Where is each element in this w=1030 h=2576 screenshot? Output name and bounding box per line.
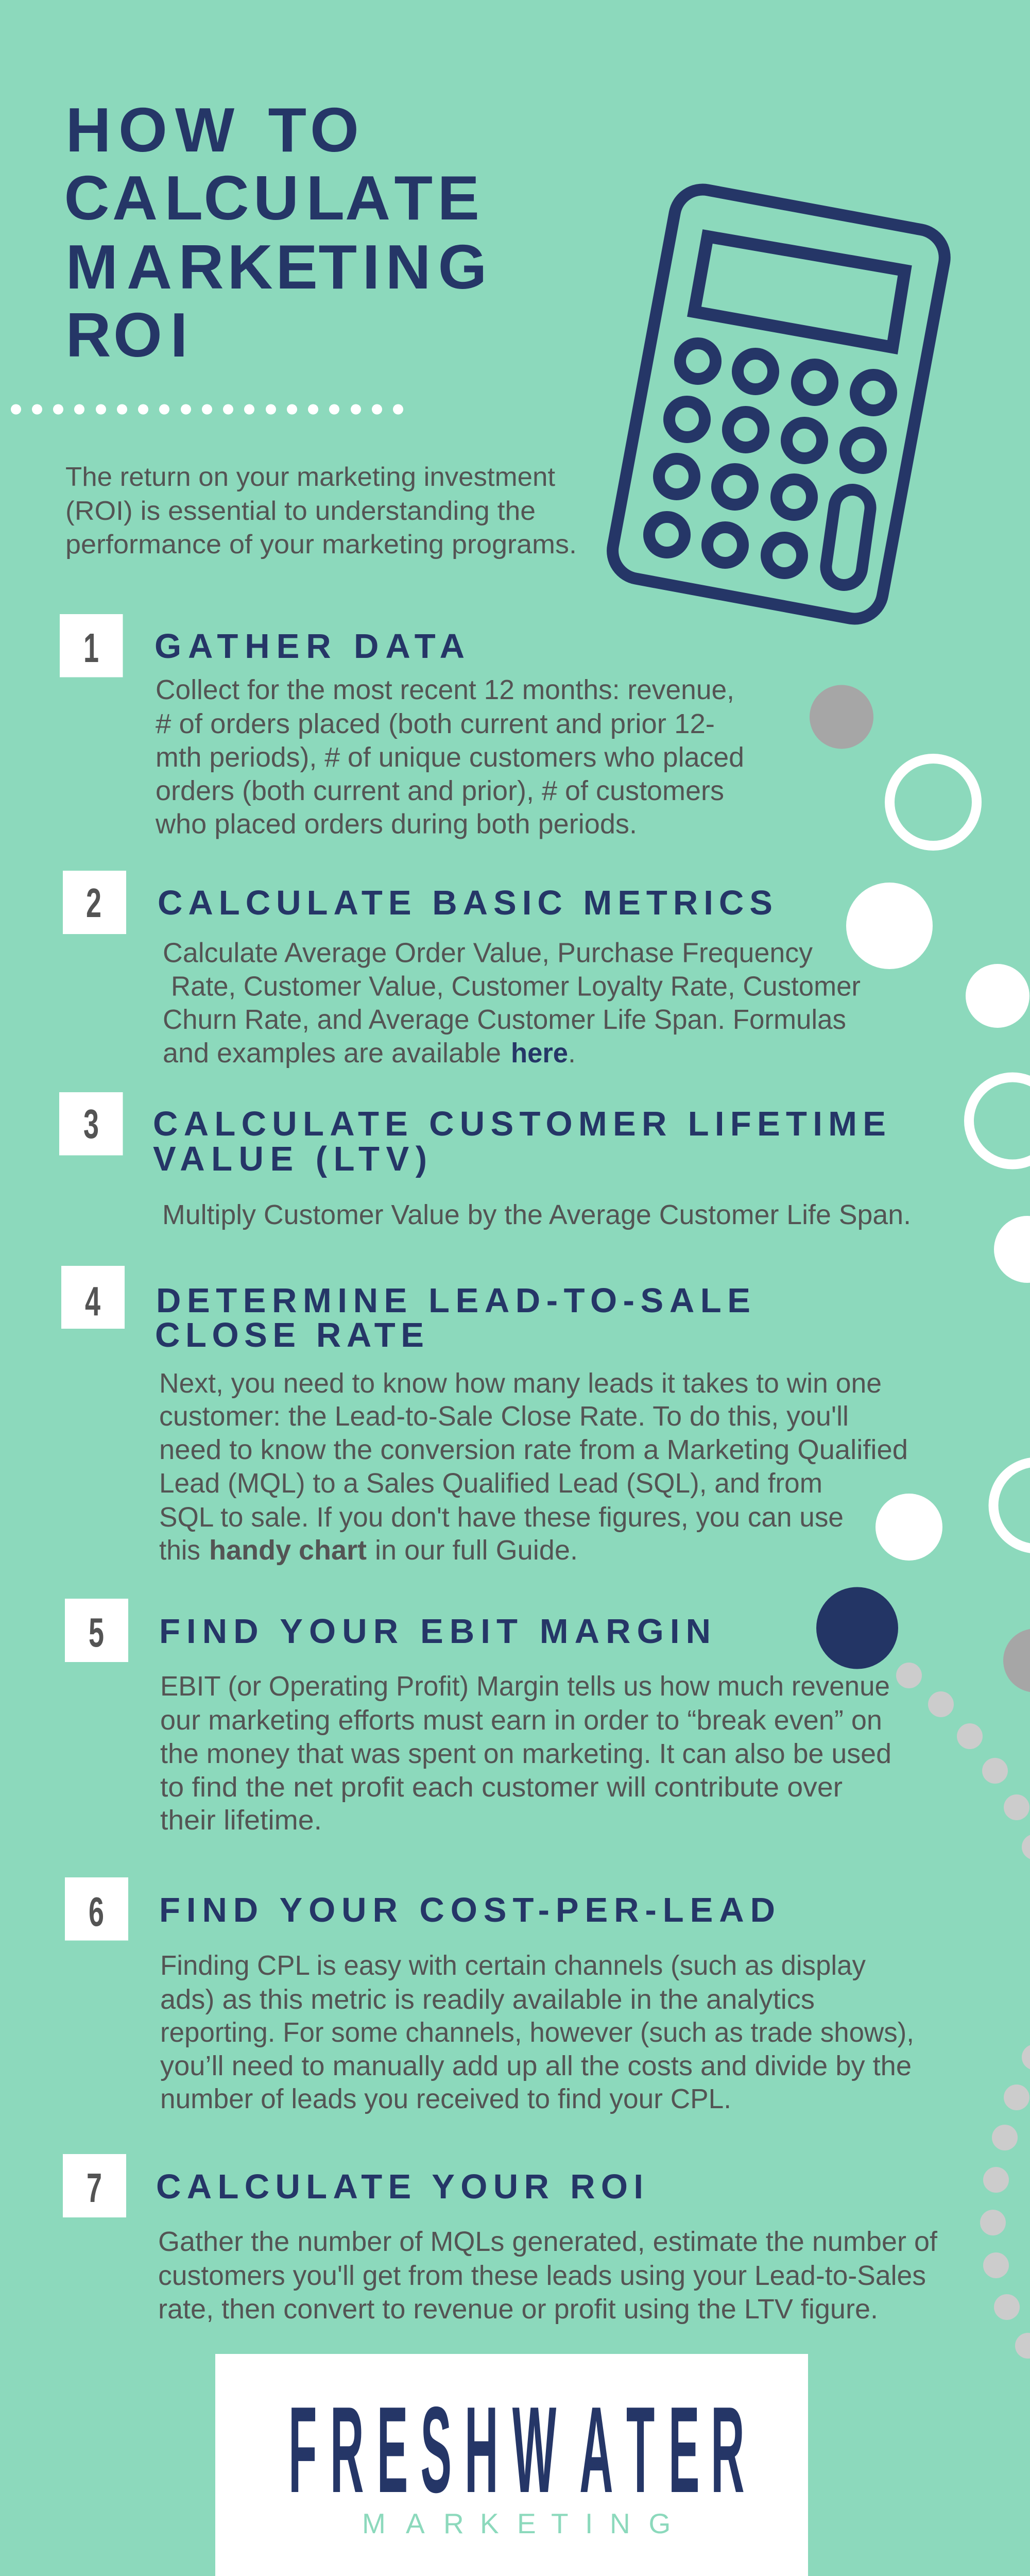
body text 5: our marketing efforts must earn in order to “break even” on [160, 1705, 882, 1736]
heading 4: CLOSE RATE [155, 1316, 424, 1354]
body text 7: customers you'll get from these leads using your Lead-to-Sales [158, 2260, 926, 2291]
heading 2: CALCULATE BASIC METRICS [158, 884, 772, 922]
title: MARKETING [66, 232, 487, 302]
body text 5: EBIT (or Operating Profit) Margin tells us how much revenue [160, 1671, 890, 1702]
number badge 5 [65, 1599, 128, 1662]
body text 6: reporting. For some channels, however (such as trade shows), [160, 2017, 914, 2048]
body text 4: handy chart [209, 1535, 367, 1566]
body text 7 [158, 2226, 938, 2325]
number badge 2: 2 [86, 880, 101, 926]
step 2: calculate basic metrics [63, 871, 861, 1069]
logo subtitle: MARKETING [362, 2507, 671, 2539]
heading 3 [153, 1105, 886, 1178]
step 1: gather data [60, 614, 744, 840]
body text 4: in our full Guide. [375, 1535, 578, 1566]
body text 6 [160, 1950, 914, 2114]
number badge 2 [63, 871, 126, 934]
body text 4: Lead (MQL) to a Sales Qualified Lead (SQL), and from [159, 1468, 822, 1499]
number badge 6: 6 [89, 1889, 104, 1935]
logo wordmark: FRESHWATER [288, 2382, 744, 2519]
body text 1: # of orders placed (both current and prior 12- [156, 708, 715, 739]
intro text: (ROI) is essential to understanding the [65, 496, 536, 526]
title [64, 95, 487, 370]
heading 4 [155, 1281, 750, 1354]
body text 2: Rate, Customer Value, Customer Loyalty Rate, Customer [171, 971, 861, 1002]
dotted divider [11, 404, 403, 414]
body text 2: Churn Rate, and Average Customer Life Span. Formulas [163, 1004, 846, 1035]
title: ROI [66, 300, 187, 370]
heading 6: FIND YOUR COST-PER-LEAD [159, 1891, 775, 1929]
body text 5: their lifetime. [160, 1805, 322, 1836]
body text 4: Next, you need to know how many leads it takes to win one [159, 1368, 882, 1399]
number badge 7 [63, 2154, 126, 2217]
body text 7: rate, then convert to revenue or profit using the LTV figure. [158, 2294, 878, 2325]
heading 4: DETERMINE LEAD-TO-SALE [156, 1281, 750, 1320]
body text 7: Gather the number of MQLs generated, estimate the number of [158, 2226, 938, 2257]
number badge 4: 4 [85, 1278, 100, 1324]
body text 6: number of leads you received to find your CPL. [160, 2083, 731, 2114]
body text 1: mth periods), # of unique customers who placed [156, 742, 744, 773]
number badge 4 [61, 1266, 125, 1329]
number badge 1 [60, 614, 123, 677]
decorative circles [810, 685, 1030, 2359]
intro text: performance of your marketing programs. [65, 530, 577, 560]
heading 5: FIND YOUR EBIT MARGIN [159, 1612, 711, 1651]
step 3: customer lifetime value [59, 1092, 911, 1230]
body text 1: who placed orders during both periods. [155, 809, 637, 840]
body text 1: Collect for the most recent 12 months: revenue, [156, 674, 734, 705]
icon: calculator [608, 185, 949, 623]
body text 5 [160, 1671, 891, 1836]
heading 7: CALCULATE YOUR ROI [156, 2167, 643, 2206]
title: CALCULATE [64, 163, 479, 233]
step 4: lead-to-sale close rate [61, 1266, 908, 1566]
number badge 5: 5 [89, 1609, 104, 1655]
number badge 7: 7 [87, 2165, 102, 2211]
step 5: EBIT margin [65, 1599, 891, 1836]
body text 5: to find the net profit each customer will contribute over [160, 1772, 843, 1803]
title: HOW TO [66, 95, 359, 165]
logo panel: Freshwater Marketing [215, 2354, 808, 2576]
body text 3: Multiply Customer Value by the Average Customer Life Span. [162, 1199, 911, 1230]
number badge 3: 3 [83, 1101, 99, 1147]
step 6: cost-per-lead [65, 1877, 914, 2114]
body text 4: need to know the conversion rate from a Marketing Qualified [159, 1434, 908, 1465]
body text 4: this [159, 1535, 200, 1566]
body text 2: here [511, 1038, 568, 1069]
body text 4 [159, 1368, 908, 1566]
body text 2: . [568, 1038, 576, 1069]
number badge 1: 1 [83, 625, 99, 671]
number badge 6 [65, 1877, 128, 1940]
body text 6: ads) as this metric is readily available in the analytics [160, 1984, 815, 2015]
body text 6: you’ll need to manually add up all the costs and divide by the [160, 2050, 912, 2081]
heading 3: CALCULATE CUSTOMER LIFETIME [153, 1105, 886, 1143]
body text 5: the money that was spent on marketing. It can also be used [160, 1738, 891, 1769]
body text 4: SQL to sale. If you don't have these figures, you can use [159, 1502, 844, 1533]
number badge 3 [59, 1092, 123, 1155]
heading 1: GATHER DATA [154, 627, 465, 666]
step 7: calculate your ROI [63, 2154, 938, 2325]
body text 6: Finding CPL is easy with certain channels (such as display [160, 1950, 866, 1981]
heading 3: VALUE (LTV) [153, 1140, 427, 1178]
body text 4: customer: the Lead-to-Sale Close Rate. To do this, you'll [159, 1401, 849, 1432]
body text 1 [155, 674, 744, 840]
body text 1: orders (both current and prior), # of customers [156, 775, 724, 806]
body text 2: Calculate Average Order Value, Purchase Frequency [163, 938, 813, 969]
body text 2 [163, 938, 861, 1069]
body text 2: and examples are available [163, 1038, 501, 1069]
intro text [65, 462, 577, 560]
intro text: The return on your marketing investment [65, 462, 556, 492]
